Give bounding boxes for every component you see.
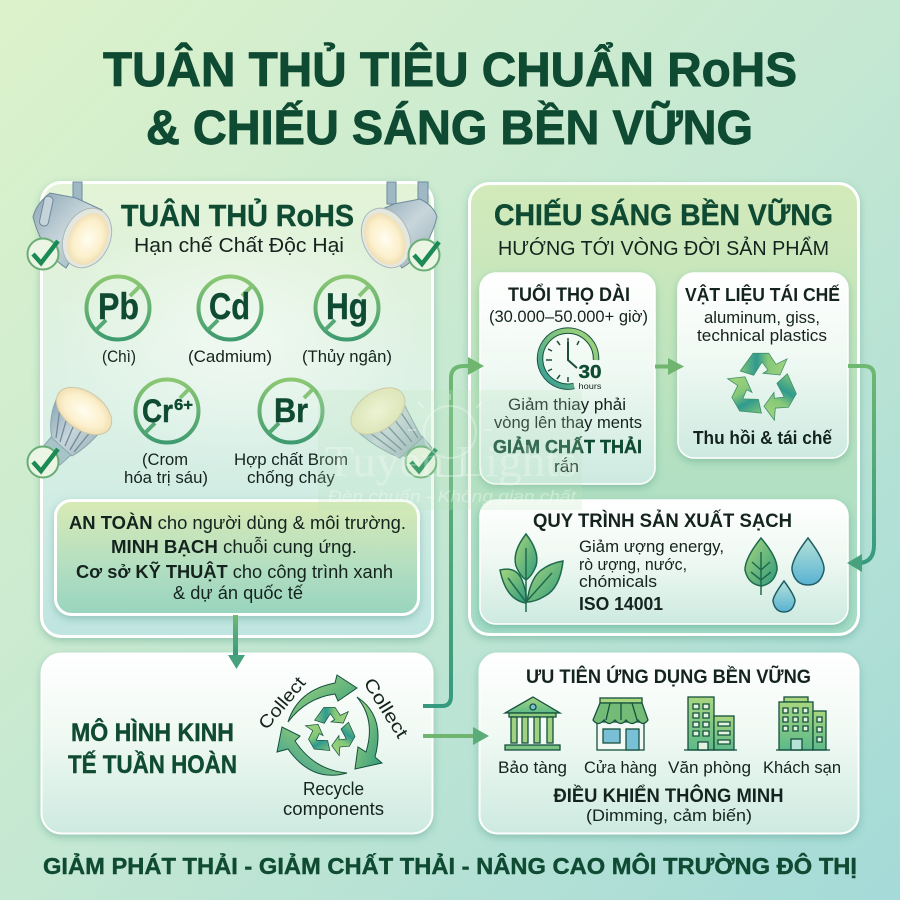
callout: benefits [56, 500, 418, 614]
arrow: circular economy to applications [423, 727, 489, 745]
card: long lifetime: TUỔI THỌ DÀI [508, 284, 630, 306]
icon: banned chromium: Cr [142, 393, 173, 429]
card: clean production: chómicals [579, 572, 657, 591]
heading: applications: ƯU TIÊN ỨNG DỤNG BỀN VỮNG [526, 666, 811, 688]
callout: benefits: AN TOÀN cho người dùng & môi trường. [69, 512, 406, 533]
icon: cycle arrows [277, 675, 382, 775]
panel: RoHS compliance [28, 182, 440, 636]
icon: plant [500, 534, 563, 612]
icon: clock [540, 331, 602, 391]
icon: check bottom left [28, 446, 58, 478]
card: recycled materials: Thu hồi & tái chế [693, 428, 833, 448]
panel subheading: HƯỚNG TỚI VÒNG ĐỜI SẢN PHẨM [498, 237, 829, 260]
label: lead: (Chì) [102, 347, 136, 366]
label: bromine [234, 450, 348, 487]
icon: banned lead [86, 276, 150, 340]
card: recycled materials: aluminum, giss, [704, 308, 820, 327]
icon: lamp bottom left [42, 378, 120, 465]
label: mercury: (Thủy ngân) [302, 347, 392, 366]
callout: benefits: MINH BẠCH chuỗi cung ứng. [111, 536, 357, 557]
card: long lifetime: GIẢM CHẤT THẢI [493, 436, 642, 457]
icon: clock: hours [578, 382, 602, 391]
label: recycle components: Recycle [303, 779, 364, 799]
label: recycle components [283, 779, 384, 819]
callout: benefits: & dự án quốc tế [173, 583, 303, 603]
label: chromium [124, 450, 208, 487]
label: hotel: Khách sạn [763, 758, 841, 777]
card: clean production [480, 500, 848, 624]
heading: circular economy [68, 717, 237, 779]
card: long lifetime: Giảm thiay phải [508, 395, 626, 414]
card: recycled materials [678, 273, 848, 458]
icon: banned bromine: Br [274, 392, 308, 430]
label: smart control: (Dimming, cảm biến) [586, 806, 752, 825]
arrow: RoHS to circular economy [228, 615, 245, 669]
footer slogan: GIẢM PHÁT THẢI - GIẢM CHẤT THẢI - NÂNG CAO MÔI TRƯỜNG ĐÔ THỊ [43, 851, 857, 879]
icon: spotlight top right [352, 182, 437, 276]
icon: banned cadmium [198, 276, 262, 340]
icon: small water drop [773, 581, 795, 612]
icon: banned lead: Pb [98, 286, 139, 327]
label: office: Văn phòng [668, 758, 751, 777]
panel: sustainable lighting [470, 184, 874, 634]
panel: circular economy [42, 654, 432, 834]
label: smart control [554, 785, 784, 825]
label: cadmium: (Cadmium) [188, 347, 272, 366]
card: clean production: rò ượng, nước, [579, 555, 687, 574]
label: shop: Cửa hàng [584, 758, 657, 777]
title: & CHIẾU SÁNG BỀN VỮNG [146, 100, 753, 155]
card: clean production: QUY TRÌNH SẢN XUẤT SẠCH [533, 510, 792, 532]
label: recycle components: components [283, 799, 384, 819]
card: long lifetime: (30.000–50.000+ giờ) [489, 307, 648, 326]
arrow: circular economy to lifetime [423, 357, 484, 706]
icon: museum [505, 697, 560, 750]
icon: recycle [723, 353, 803, 423]
label: smart control: ĐIỀU KHIỂN THÔNG MINH [554, 785, 784, 807]
icon: leaf [745, 538, 777, 595]
label: chromium: (Crom [142, 450, 188, 469]
card: long lifetime: rắn [554, 457, 579, 476]
panel heading: CHIẾU SÁNG BỀN VỮNG [494, 198, 833, 232]
heading: circular economy: TẾ TUẦN HOÀN [68, 750, 237, 779]
panel: sustainable applications [480, 654, 858, 834]
icon: banned bromine [260, 380, 322, 442]
label: collect left: Collect [254, 673, 310, 733]
card: clean production: ISO 14001 [579, 594, 663, 614]
label: chromium: hóa trị sáu) [124, 468, 208, 487]
icon: clock: 30 [578, 362, 602, 382]
card: clean production: Giảm ượng energy, [579, 537, 724, 556]
icon: check top left [28, 238, 58, 270]
icon: shop [593, 698, 648, 750]
label: bromine: Hợp chất Brom [234, 450, 348, 469]
icon: banned mercury: Hg [326, 286, 368, 327]
icon: hotel [776, 697, 830, 750]
label: bromine: chống cháy [247, 468, 336, 487]
icon: check bottom right [406, 446, 436, 478]
icon: office [684, 697, 737, 750]
card: long lifetime [480, 273, 655, 484]
card: recycled materials: technical plastics [697, 326, 827, 345]
watermark: Tuyen Lights [325, 437, 577, 486]
watermark: Đèn chuẩn - Không gian chất [328, 487, 577, 506]
card: long lifetime: vòng lên thay ments [494, 413, 642, 432]
watermark [318, 390, 582, 510]
arrow: lifetime to materials [655, 358, 684, 375]
panel heading: TUÂN THỦ RoHS [121, 197, 354, 233]
icon: banned cadmium: Cd [209, 286, 250, 327]
icon: banned chromium: 6+ [174, 397, 193, 414]
icon: large water drop [792, 538, 824, 585]
arrow: materials to clean production [847, 366, 874, 572]
callout: benefits: Cơ sở KỸ THUẬT cho công trình xanh [76, 561, 393, 582]
card: recycled materials: VẬT LIỆU TÁI CHẾ [685, 284, 840, 305]
icon: banned mercury [316, 276, 378, 340]
icon: check top right [408, 240, 440, 270]
title [103, 42, 797, 155]
icon: spotlight top left [33, 182, 121, 276]
label: collect right: Collect [360, 674, 412, 742]
heading: circular economy: MÔ HÌNH KINH [71, 717, 234, 747]
icon: lamp bottom right [343, 378, 432, 465]
icon: banned chromium [136, 380, 198, 442]
title: TUÂN THỦ TIÊU CHUẨN RoHS [103, 42, 797, 97]
panel subheading: Hạn chế Chất Độc Hại [134, 235, 344, 257]
label: museum: Bảo tàng [498, 758, 567, 777]
